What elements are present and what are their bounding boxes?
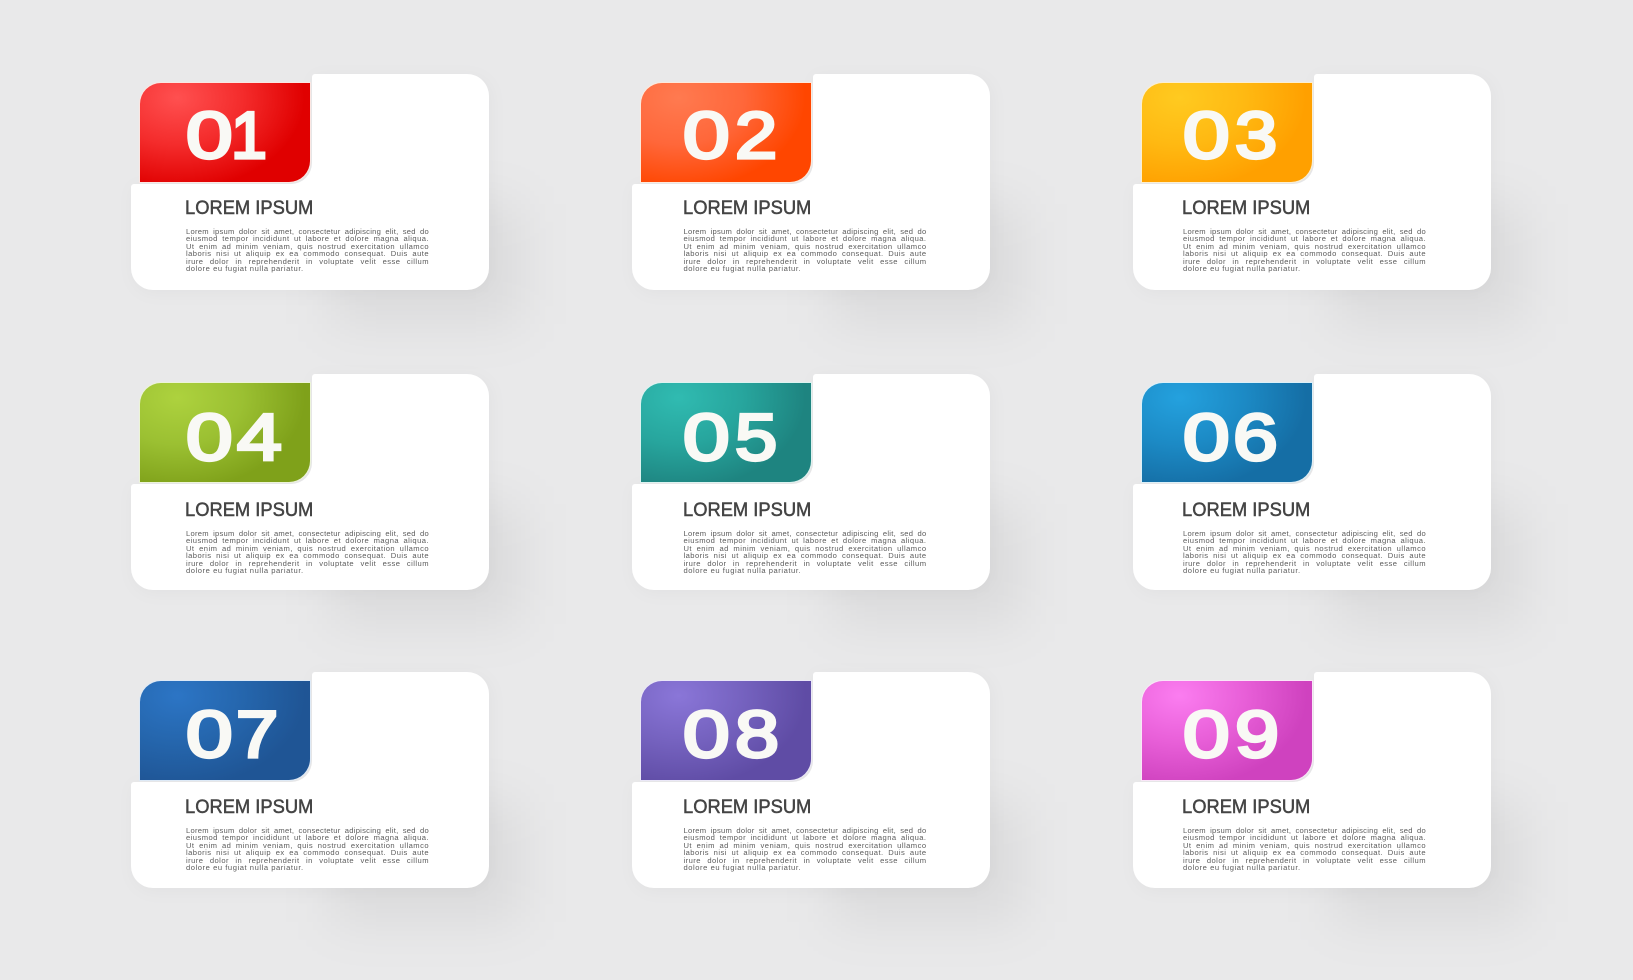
number 05 [683,400,777,474]
number 02: 2 [735,98,777,172]
body text: laboris nisi ut aliquip ex ea commodo consequat. Duis aute [684,551,926,560]
body text: laboris nisi ut aliquip ex ea commodo consequat. Duis aute [186,551,429,560]
body text: Ut enim ad minim veniam, quis nostrud exercitation ullamco [1183,242,1426,251]
body text: irure dolor in reprehenderit in voluptate velit esse cillum [1183,257,1426,266]
body text: Lorem ipsum dolor sit amet, consectetur adipiscing elit, sed do [684,529,926,538]
number tab 08 [641,681,810,780]
body text: irure dolor in reprehenderit in voluptate velit esse cillum [1183,559,1426,568]
number tab 01 [140,83,310,182]
heading: LOREM IPSUM [1182,499,1310,521]
body text: irure dolor in reprehenderit in voluptate velit esse cillum [1183,856,1426,865]
number 09: 0 [1182,697,1229,771]
body text: Ut enim ad minim veniam, quis nostrud exercitation ullamco [1183,544,1426,553]
number 06: 6 [1232,400,1277,474]
number 05: 0 [683,400,730,474]
heading: LOREM IPSUM [682,197,811,219]
body text: Ut enim ad minim veniam, quis nostrud exercitation ullamco [684,841,926,850]
body text: Lorem ipsum dolor sit amet, consectetur adipiscing elit, sed do [1183,529,1426,538]
body text: irure dolor in reprehenderit in voluptate velit esse cillum [186,856,429,865]
number 09: 9 [1234,697,1279,771]
heading: LOREM IPSUM [185,197,313,219]
heading: LOREM IPSUM [1182,796,1310,818]
heading: LOREM IPSUM [682,796,811,818]
panel: card 08 [632,672,1018,918]
number tab 03 [1142,83,1312,182]
heading: LOREM IPSUM [185,796,313,818]
number tab 04 [140,383,310,482]
body text: Lorem ipsum dolor sit amet, consectetur adipiscing elit, sed do [186,529,429,538]
body text: Ut enim ad minim veniam, quis nostrud exercitation ullamco [684,242,926,251]
body text: eiusmod tempor incididunt ut labore et dolore magna aliqua. [186,536,429,545]
body text: dolore eu fugiat nulla pariatur. [186,264,304,273]
body text [684,826,926,872]
body text [1183,227,1426,273]
number 03: 0 [1182,98,1229,172]
body text: eiusmod tempor incididunt ut labore et dolore magna aliqua. [1183,833,1426,842]
number 07: 0 [186,697,232,771]
body text: irure dolor in reprehenderit in voluptate velit esse cillum [684,257,926,266]
number 04: 4 [237,400,282,474]
body text: Lorem ipsum dolor sit amet, consectetur adipiscing elit, sed do [186,826,429,835]
number 07: 7 [236,697,278,771]
body text: irure dolor in reprehenderit in voluptate velit esse cillum [684,559,926,568]
body text: eiusmod tempor incididunt ut labore et dolore magna aliqua. [1183,536,1426,545]
number 08: 0 [683,697,730,771]
number 01: 1 [230,98,266,172]
panel: card 05 [632,374,1018,620]
heading: LOREM IPSUM [682,499,811,521]
panel: card 09 [1133,672,1518,918]
number tab 07 [140,681,310,780]
panel: card 03 [1133,74,1518,320]
heading: LOREM IPSUM [185,499,313,521]
body text [186,529,429,575]
body text: dolore eu fugiat nulla pariatur. [186,863,304,872]
body text: eiusmod tempor incididunt ut labore et dolore magna aliqua. [684,234,926,243]
number 05: 5 [735,400,777,474]
number 04: 0 [186,400,232,474]
body text: Ut enim ad minim veniam, quis nostrud exercitation ullamco [186,242,429,251]
number tab 09 [1142,681,1312,780]
body text: dolore eu fugiat nulla pariatur. [684,566,801,575]
number 06 [1182,400,1277,474]
heading: LOREM IPSUM [1182,197,1310,219]
body text: laboris nisi ut aliquip ex ea commodo consequat. Duis aute [186,249,429,258]
body text: eiusmod tempor incididunt ut labore et dolore magna aliqua. [684,536,926,545]
body text: eiusmod tempor incididunt ut labore et dolore magna aliqua. [186,234,429,243]
number 08: 8 [734,697,779,771]
body text: irure dolor in reprehenderit in voluptate velit esse cillum [684,856,926,865]
number 04 [186,400,282,474]
body text: irure dolor in reprehenderit in voluptate velit esse cillum [186,559,429,568]
body text: Lorem ipsum dolor sit amet, consectetur adipiscing elit, sed do [684,227,926,236]
body text: eiusmod tempor incididunt ut labore et dolore magna aliqua. [684,833,926,842]
body text: laboris nisi ut aliquip ex ea commodo consequat. Duis aute [1183,551,1426,560]
body text [1183,826,1426,872]
body text: laboris nisi ut aliquip ex ea commodo consequat. Duis aute [186,848,429,857]
number 01: 0 [186,98,232,172]
body text: Ut enim ad minim veniam, quis nostrud exercitation ullamco [186,544,429,553]
number 09 [1182,697,1279,771]
body text: laboris nisi ut aliquip ex ea commodo consequat. Duis aute [684,848,926,857]
number tab 05 [641,383,810,482]
body text: Ut enim ad minim veniam, quis nostrud exercitation ullamco [1183,841,1426,850]
body text: dolore eu fugiat nulla pariatur. [1183,566,1301,575]
panel: card 07 [131,672,516,918]
number 03 [1182,98,1277,172]
panel: card 01 [131,74,516,320]
body text [186,826,429,872]
panel: card 06 [1133,374,1518,620]
number 02 [683,98,777,172]
body text: Ut enim ad minim veniam, quis nostrud exercitation ullamco [186,841,429,850]
body text: dolore eu fugiat nulla pariatur. [1183,264,1301,273]
number 02: 0 [683,98,730,172]
number 06: 0 [1182,400,1229,474]
body text: laboris nisi ut aliquip ex ea commodo consequat. Duis aute [1183,249,1426,258]
body text: Lorem ipsum dolor sit amet, consectetur adipiscing elit, sed do [1183,227,1426,236]
body text: Lorem ipsum dolor sit amet, consectetur adipiscing elit, sed do [684,826,926,835]
body text: irure dolor in reprehenderit in voluptate velit esse cillum [186,257,429,266]
body text [684,529,926,575]
body text: dolore eu fugiat nulla pariatur. [186,566,304,575]
number 03: 3 [1234,98,1277,172]
body text [186,227,429,273]
number 07 [186,697,278,771]
body text: Ut enim ad minim veniam, quis nostrud exercitation ullamco [684,544,926,553]
number 01 [186,98,266,172]
body text [684,227,926,273]
body text: dolore eu fugiat nulla pariatur. [1183,863,1301,872]
body text [1183,529,1426,575]
body text: laboris nisi ut aliquip ex ea commodo consequat. Duis aute [1183,848,1426,857]
panel: card 02 [632,74,1018,320]
number 08 [683,697,779,771]
number tab 06 [1142,383,1312,482]
body text: dolore eu fugiat nulla pariatur. [684,863,801,872]
body text: dolore eu fugiat nulla pariatur. [684,264,801,273]
body text: laboris nisi ut aliquip ex ea commodo consequat. Duis aute [684,249,926,258]
panel: card 04 [131,374,516,620]
body text: eiusmod tempor incididunt ut labore et dolore magna aliqua. [186,833,429,842]
body text: Lorem ipsum dolor sit amet, consectetur adipiscing elit, sed do [1183,826,1426,835]
number tab 02 [641,83,810,182]
body text: Lorem ipsum dolor sit amet, consectetur adipiscing elit, sed do [186,227,429,236]
body text: eiusmod tempor incididunt ut labore et dolore magna aliqua. [1183,234,1426,243]
